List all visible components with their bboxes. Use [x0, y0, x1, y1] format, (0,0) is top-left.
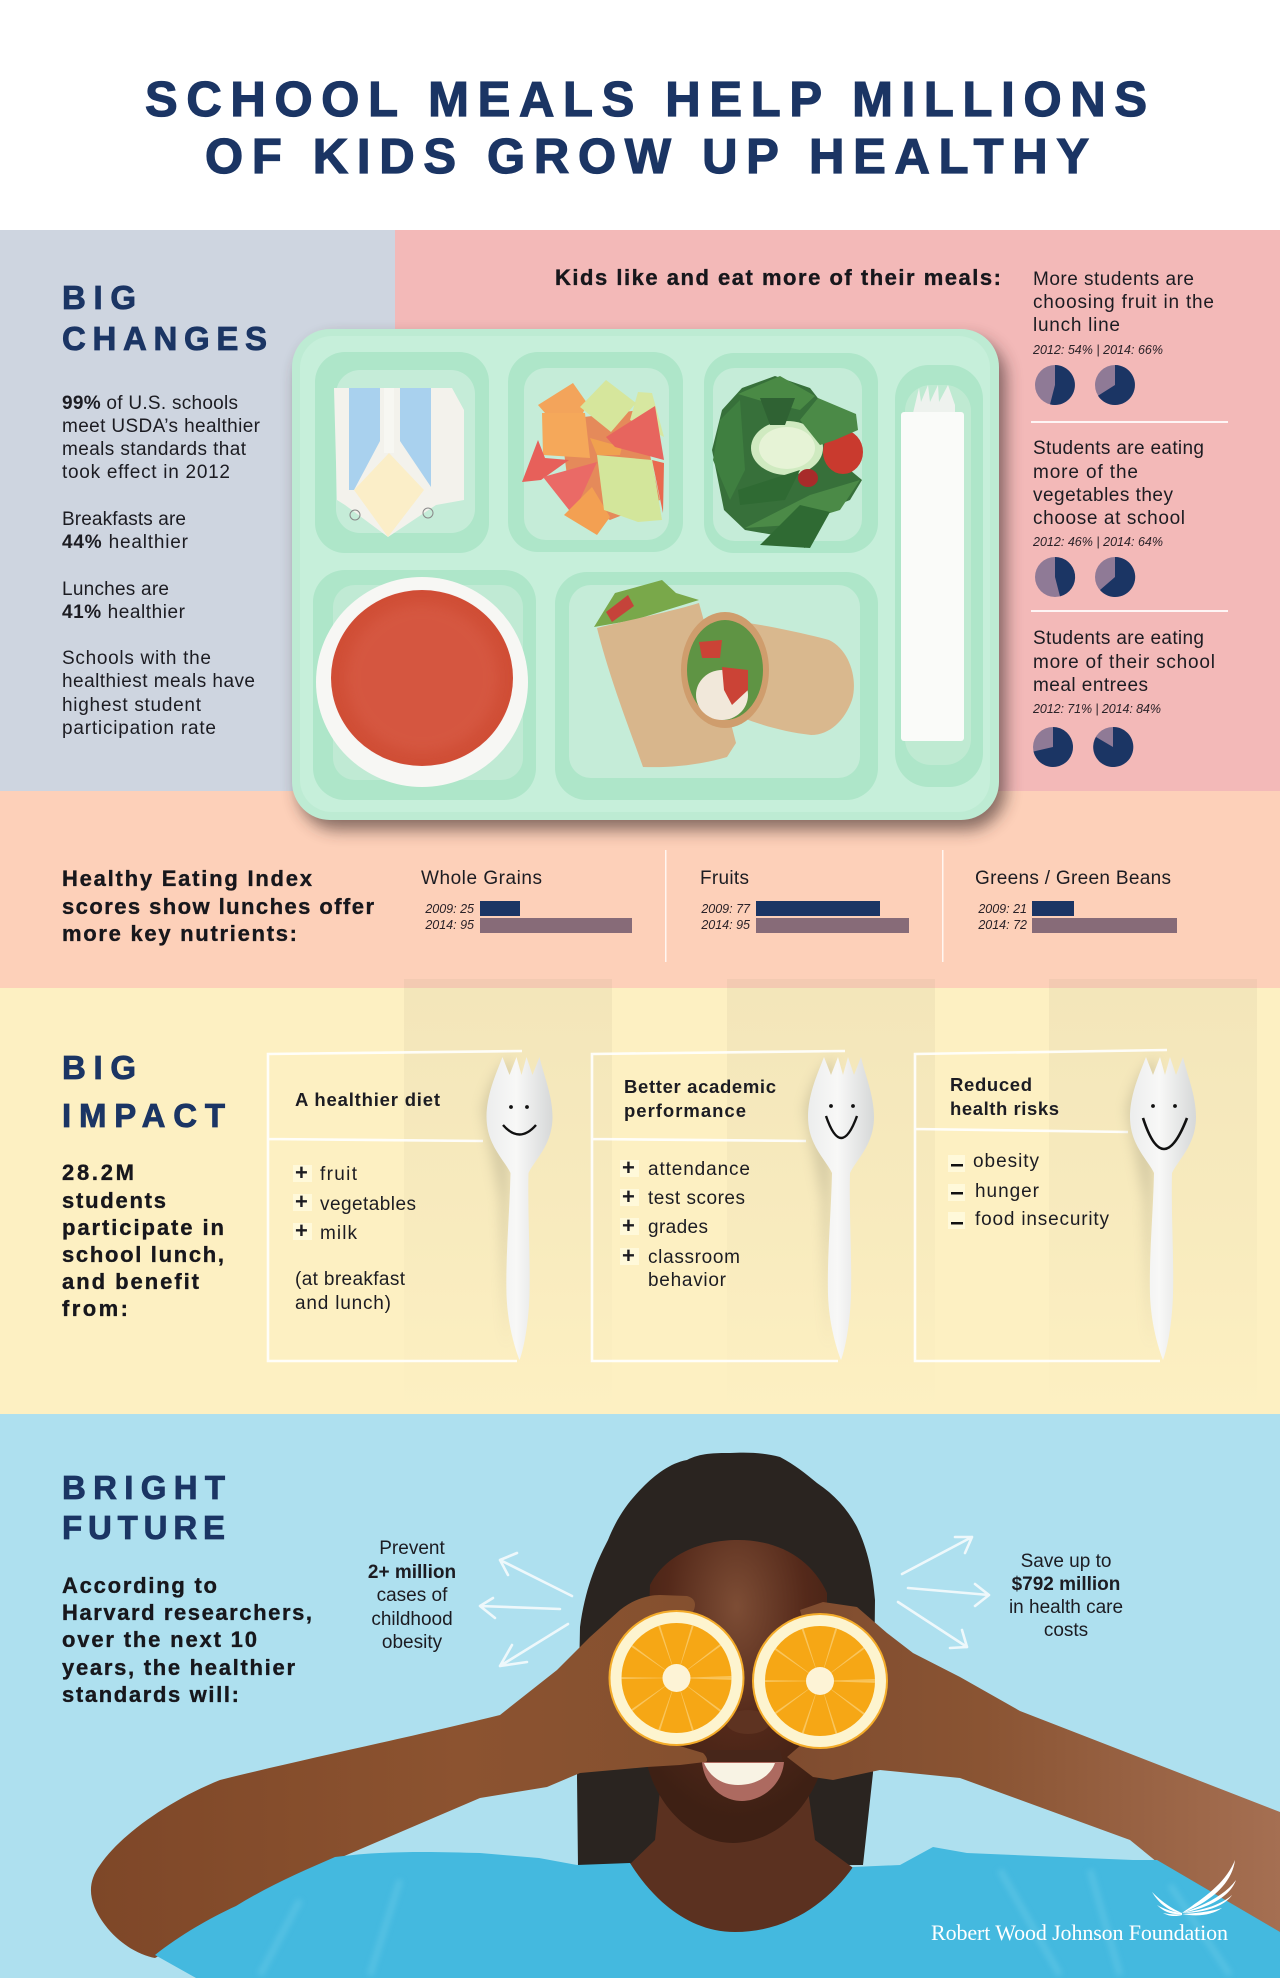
card: a healthier diet: A healthier diet	[295, 1089, 440, 1110]
text: healthy eating index: more key nutrients:	[62, 921, 297, 946]
heading: big impact	[62, 1049, 225, 1134]
text: healthy eating index: Healthy Eating Index	[62, 866, 313, 891]
text: students participating: students	[62, 1188, 166, 1213]
pie 2012 46%	[1035, 557, 1075, 597]
illustration: girl holding orange slices	[91, 1453, 1280, 1978]
panel: kids like and eat stats	[1031, 269, 1228, 767]
heading: big impact: IMPACT	[62, 1097, 225, 1134]
text: change statistics: 41% healthier	[62, 602, 186, 623]
list: academic benefits: +	[622, 1155, 635, 1180]
text: students participating: school lunch,	[62, 1242, 224, 1267]
bar chart: greens and green beans	[975, 868, 1177, 933]
bar chart: whole grains: Whole Grains	[421, 868, 542, 889]
icon: smiling spork	[1126, 1057, 1196, 1360]
stat: entrees: meal entrees	[1033, 675, 1148, 696]
stat: fruit: lunch line	[1033, 315, 1120, 336]
heading: bright future: BRIGHT	[62, 1469, 225, 1506]
bar chart: whole grains: 2014: 95	[424, 918, 474, 932]
pie 2012 71%	[1033, 727, 1073, 767]
text: change statistics	[62, 393, 261, 739]
stat: entrees: more of their school	[1033, 652, 1215, 673]
heading: big changes: BIG	[62, 279, 136, 316]
bar chart: greens and green beans: 2014: 72	[977, 918, 1027, 932]
text: change statistics: Lunches are	[62, 579, 169, 600]
panel: healthy eating index	[62, 850, 1177, 962]
list: reduced risks	[948, 1151, 1110, 1230]
heading: bright future: FUTURE	[62, 1509, 225, 1546]
fruit salad	[522, 380, 664, 535]
title: OF KIDS GROW UP HEALTHY	[205, 130, 1089, 184]
callout: prevent obesity: childhood	[371, 1609, 453, 1630]
bar chart: whole grains	[421, 868, 632, 933]
heading: kids like their meals: Kids like and eat more of their meals:	[555, 265, 1001, 290]
text: healthy eating index	[62, 866, 374, 946]
card: reduced health risks	[915, 1050, 1196, 1361]
callout: prevent obesity: cases of	[377, 1585, 448, 1606]
stat: fruit	[1032, 269, 1214, 405]
callout: save health care costs	[1009, 1551, 1123, 1641]
callout: prevent obesity: 2+ million	[368, 1562, 456, 1583]
stat: fruit: 2012: 54% | 2014: 66%	[1032, 343, 1163, 357]
illustration: lunch tray	[292, 329, 1006, 830]
pie 2014 84%	[1093, 727, 1133, 767]
stat: vegetables: 2012: 46% | 2014: 64%	[1032, 535, 1163, 549]
shirt	[155, 1847, 1280, 1978]
card: a healthier diet	[268, 1051, 552, 1361]
stat: vegetables: choose at school	[1033, 508, 1185, 529]
text: students participating: from:	[62, 1296, 128, 1321]
bar chart: fruits: Fruits	[700, 868, 749, 889]
text: change statistics: Breakfasts are	[62, 509, 186, 530]
bowl of tomato soup	[316, 577, 528, 787]
bar chart: fruits: 2014: 95	[700, 918, 750, 932]
chicken wrap	[594, 580, 854, 767]
card: better academic performance	[592, 1051, 874, 1361]
bar chart: fruits	[700, 868, 909, 933]
text: students participating: 28.2M	[62, 1160, 134, 1185]
stat: entrees	[1032, 628, 1215, 767]
card: reduced health risks: Reduced	[950, 1074, 1032, 1095]
callout: save health care costs: $792 million	[1012, 1574, 1120, 1595]
napkin and fork	[901, 385, 964, 741]
list: academic benefits	[620, 1155, 750, 1291]
list: diet benefits: +	[295, 1160, 308, 1185]
list: diet benefits: and lunch)	[295, 1293, 391, 1314]
list: academic benefits: +	[622, 1184, 635, 1209]
stat: vegetables: vegetables they	[1033, 485, 1174, 506]
list: academic benefits: grades	[648, 1217, 708, 1238]
callout: save health care costs: costs	[1044, 1620, 1088, 1641]
hair	[577, 1453, 875, 1867]
mouth	[702, 1750, 784, 1801]
tray compartments	[313, 352, 983, 800]
heading: big changes	[62, 279, 267, 357]
list: academic benefits: +	[622, 1243, 635, 1268]
background: faint spork shadows	[404, 979, 1257, 1414]
logo: robert wood johnson foundation	[931, 1860, 1236, 1945]
text: change statistics: took effect in 2012	[62, 462, 230, 483]
icon: left orange slice	[608, 1610, 744, 1746]
card: better academic performance: Better academic	[624, 1076, 776, 1097]
text: according to harvard researchers: years, the healthier	[62, 1655, 295, 1680]
arrows: right burst	[898, 1537, 989, 1648]
shirt folds	[260, 1870, 1230, 1975]
pie 2012 54%	[1035, 365, 1075, 405]
text: students participating	[62, 1160, 224, 1321]
card: reduced health risks: health risks	[950, 1098, 1059, 1119]
heading: bright future	[62, 1469, 225, 1546]
pie 2014 64%	[1095, 557, 1135, 597]
bar chart: whole grains: 2009: 25	[424, 902, 474, 916]
text: change statistics: meals standards that	[62, 439, 247, 460]
stat: entrees: Students are eating	[1033, 628, 1204, 649]
bar chart: greens and green beans: Greens / Green Beans	[975, 868, 1171, 889]
logo wings	[1152, 1860, 1236, 1916]
list: academic benefits: attendance	[648, 1159, 750, 1180]
list: academic benefits: +	[622, 1213, 635, 1238]
green salad	[712, 376, 863, 548]
list: diet benefits: fruit	[320, 1164, 358, 1185]
stat: vegetables: more of the	[1033, 462, 1138, 483]
text: according to harvard researchers: standards will:	[62, 1682, 239, 1707]
list: diet benefits: milk	[320, 1223, 358, 1244]
list: academic benefits: test scores	[648, 1188, 745, 1209]
icon: smiling spork	[804, 1057, 874, 1360]
callout: prevent obesity: Prevent	[379, 1538, 445, 1559]
title	[145, 73, 1147, 184]
text: change statistics: 44% healthier	[62, 532, 189, 553]
neck	[628, 1790, 856, 1945]
text: students participating: participate in	[62, 1215, 224, 1240]
stat: vegetables	[1032, 438, 1204, 597]
face	[646, 1540, 827, 1843]
text: according to harvard researchers: Harvard researchers,	[62, 1600, 312, 1625]
list: reduced risks: obesity	[973, 1151, 1040, 1172]
list: diet benefits: +	[295, 1189, 308, 1214]
stat: vegetables: Students are eating	[1033, 438, 1204, 459]
left arm and hand	[91, 1595, 707, 1958]
right arm and hand	[787, 1602, 1280, 1935]
list: academic benefits: behavior	[648, 1270, 727, 1291]
panel: bright future	[62, 1469, 1236, 1945]
text: change statistics: healthiest meals have	[62, 671, 255, 692]
bar chart: greens and green beans: 2009: 21	[977, 902, 1027, 916]
text: students participating: and benefit	[62, 1269, 200, 1294]
title: SCHOOL MEALS HELP MILLIONS	[145, 73, 1147, 127]
list: diet benefits: +	[295, 1218, 308, 1243]
text: according to harvard researchers: According to	[62, 1573, 217, 1598]
icon: smiling spork	[482, 1057, 552, 1360]
stat: fruit: More students are	[1033, 269, 1194, 290]
panel: big changes	[62, 279, 267, 739]
text: healthy eating index: scores show lunches offer	[62, 894, 374, 919]
arrows: left burst	[480, 1553, 572, 1666]
text: change statistics: participation rate	[62, 718, 216, 739]
list: diet benefits: vegetables	[320, 1194, 416, 1215]
list: reduced risks: food insecurity	[975, 1209, 1110, 1230]
text: according to harvard researchers	[62, 1573, 312, 1707]
list: diet benefits: (at breakfast	[295, 1269, 406, 1290]
pie 2014 66%	[1095, 365, 1135, 405]
list: diet benefits	[293, 1160, 416, 1314]
text: according to harvard researchers: over the next 10	[62, 1627, 257, 1652]
text: change statistics: Schools with the	[62, 648, 211, 669]
list: reduced risks: hunger	[975, 1181, 1040, 1202]
list: academic benefits: classroom	[648, 1247, 740, 1268]
callout: prevent obesity	[368, 1538, 456, 1653]
bar chart: fruits: 2009: 77	[700, 902, 751, 916]
icon: right orange slice	[752, 1613, 888, 1749]
callout: save health care costs: Save up to	[1021, 1551, 1111, 1572]
callout: save health care costs: in health care	[1009, 1597, 1123, 1618]
stat: fruit: choosing fruit in the	[1033, 292, 1214, 313]
heading: big impact: BIG	[62, 1049, 136, 1086]
card: better academic performance: performance	[624, 1100, 746, 1121]
heading: big changes: CHANGES	[62, 320, 267, 357]
callout: prevent obesity: obesity	[382, 1632, 443, 1653]
text: change statistics: 99% of U.S. schools	[62, 393, 238, 414]
logo: robert wood johnson foundation: Robert Wood Johnson Foundation	[931, 1920, 1228, 1945]
panel: big impact	[62, 1049, 1196, 1361]
milk carton	[334, 388, 464, 537]
text: change statistics: meet USDA’s healthier	[62, 416, 261, 437]
text: change statistics: highest student	[62, 695, 202, 716]
nose	[726, 1710, 770, 1734]
stat: entrees: 2012: 71% | 2014: 84%	[1032, 702, 1161, 716]
